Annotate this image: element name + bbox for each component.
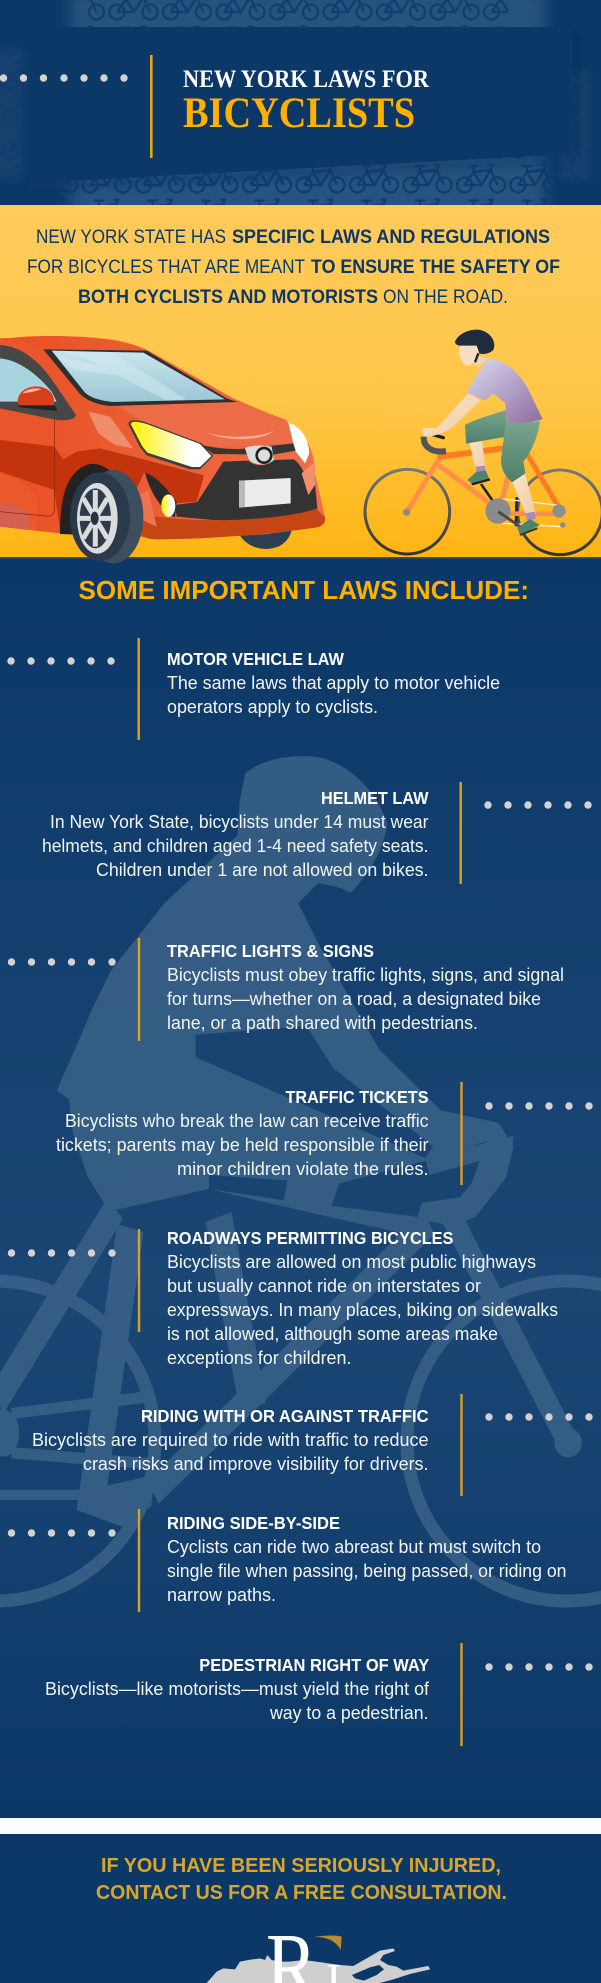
law: riding side-by-side <box>8 1509 567 1612</box>
intro text: SPECIFIC LAWS AND REGULATIONS <box>232 226 550 248</box>
intro text: TO ENSURE THE SAFETY OF <box>311 256 560 278</box>
law: roadways permitting bicycles: ROADWAYS PERMITTING BICYCLES <box>167 1228 453 1248</box>
law: roadways permitting bicycles: is not allowed, although some areas make <box>167 1324 498 1344</box>
law: roadways permitting bicycles: but usually cannot ride on interstates or <box>167 1276 481 1296</box>
law: riding side-by-side: narrow paths. <box>167 1585 276 1605</box>
panel dots <box>0 74 128 82</box>
law: traffic lights and signs: TRAFFIC LIGHTS & SIGNS <box>167 941 374 961</box>
title panel <box>0 27 572 183</box>
law: traffic tickets: minor children violate the rules. <box>177 1159 428 1179</box>
law: traffic tickets: TRAFFIC TICKETS <box>286 1087 428 1107</box>
law: riding with or against traffic: RIDING WITH OR AGAINST TRAFFIC <box>141 1406 429 1426</box>
law: traffic lights and signs: for turns—whether on a road, a designated bike <box>167 989 541 1009</box>
law: roadways permitting bicycles: expressways. In many places, biking on sidewalks <box>167 1300 558 1320</box>
logo <box>207 1914 430 1983</box>
yellow intro panel <box>0 205 601 558</box>
illustration: cyclist on bicycle <box>365 330 601 555</box>
law: traffic lights and signs: lane, or a path shared with pedestrians. <box>167 1013 478 1033</box>
law: pedestrian right of way <box>45 1643 593 1746</box>
main laws background <box>0 557 601 1608</box>
intro text: BOTH CYCLISTS AND MOTORISTS <box>78 286 378 308</box>
illustration: car <box>0 336 325 563</box>
law: riding with or against traffic <box>32 1394 593 1496</box>
law: traffic lights and signs: Bicyclists must obey traffic lights, signs, and signal <box>167 965 564 985</box>
law: traffic tickets: Bicyclists who break the law can receive traffic <box>65 1111 428 1131</box>
law: traffic tickets: tickets; parents may be held responsible if their <box>56 1135 429 1155</box>
law: pedestrian right of way: Bicyclists—like motorists—must yield the right of <box>45 1679 430 1699</box>
law: riding side-by-side: Cyclists can ride two abreast but must switch to <box>167 1537 541 1557</box>
intro text: ON THE ROAD. <box>383 286 508 308</box>
law: motor vehicle law: The same laws that apply to motor vehicle <box>167 673 500 693</box>
law: helmet law: Children under 1 are not allowed on bikes. <box>96 860 428 880</box>
header banner <box>0 0 588 205</box>
law: motor vehicle law <box>7 638 500 740</box>
title <box>183 70 430 128</box>
intro text: FOR BICYCLES THAT ARE MEANT <box>27 256 305 278</box>
law: riding with or against traffic: Bicyclists are required to ride with traffic to reduce <box>32 1430 428 1450</box>
law: helmet law: HELMET LAW <box>321 788 429 808</box>
law: traffic lights and signs <box>8 938 564 1041</box>
law: helmet law <box>42 782 592 884</box>
law: roadways permitting bicycles: exceptions for children. <box>167 1348 352 1368</box>
law: roadways permitting bicycles: Bicyclists are allowed on most public highways <box>167 1252 536 1272</box>
intro text: NEW YORK STATE HAS <box>36 226 226 248</box>
law: pedestrian right of way: PEDESTRIAN RIGHT OF WAY <box>199 1655 430 1675</box>
law: traffic tickets <box>56 1082 593 1185</box>
law: riding with or against traffic: crash risks and improve visibility for drivers. <box>83 1454 428 1474</box>
law: pedestrian right of way: way to a pedestrian. <box>269 1703 428 1723</box>
intro text <box>27 226 560 308</box>
cyclist silhouette watermark <box>0 756 601 1601</box>
law: motor vehicle law: MOTOR VEHICLE LAW <box>167 649 344 669</box>
footer panel <box>0 1818 601 1983</box>
law: riding side-by-side: RIDING SIDE-BY-SIDE <box>167 1513 340 1533</box>
law: helmet law: In New York State, bicyclists under 14 must wear <box>50 812 428 832</box>
law: helmet law: helmets, and children aged 1-4 need safety seats. <box>42 836 428 856</box>
title: BICYCLISTS <box>183 90 415 137</box>
call to action <box>96 1854 507 1904</box>
title: NEW YORK LAWS FOR <box>183 66 430 93</box>
law: motor vehicle law: operators apply to cyclists. <box>167 697 378 717</box>
call to action: IF YOU HAVE BEEN SERIOUSLY INJURED, <box>101 1854 501 1877</box>
law: roadways permitting bicycles <box>8 1228 558 1368</box>
call to action: CONTACT US FOR A FREE CONSULTATION. <box>96 1881 507 1904</box>
heading: some important laws: SOME IMPORTANT LAWS INCLUDE: <box>78 575 529 605</box>
law: riding side-by-side: single file when passing, being passed, or riding on <box>167 1561 566 1581</box>
